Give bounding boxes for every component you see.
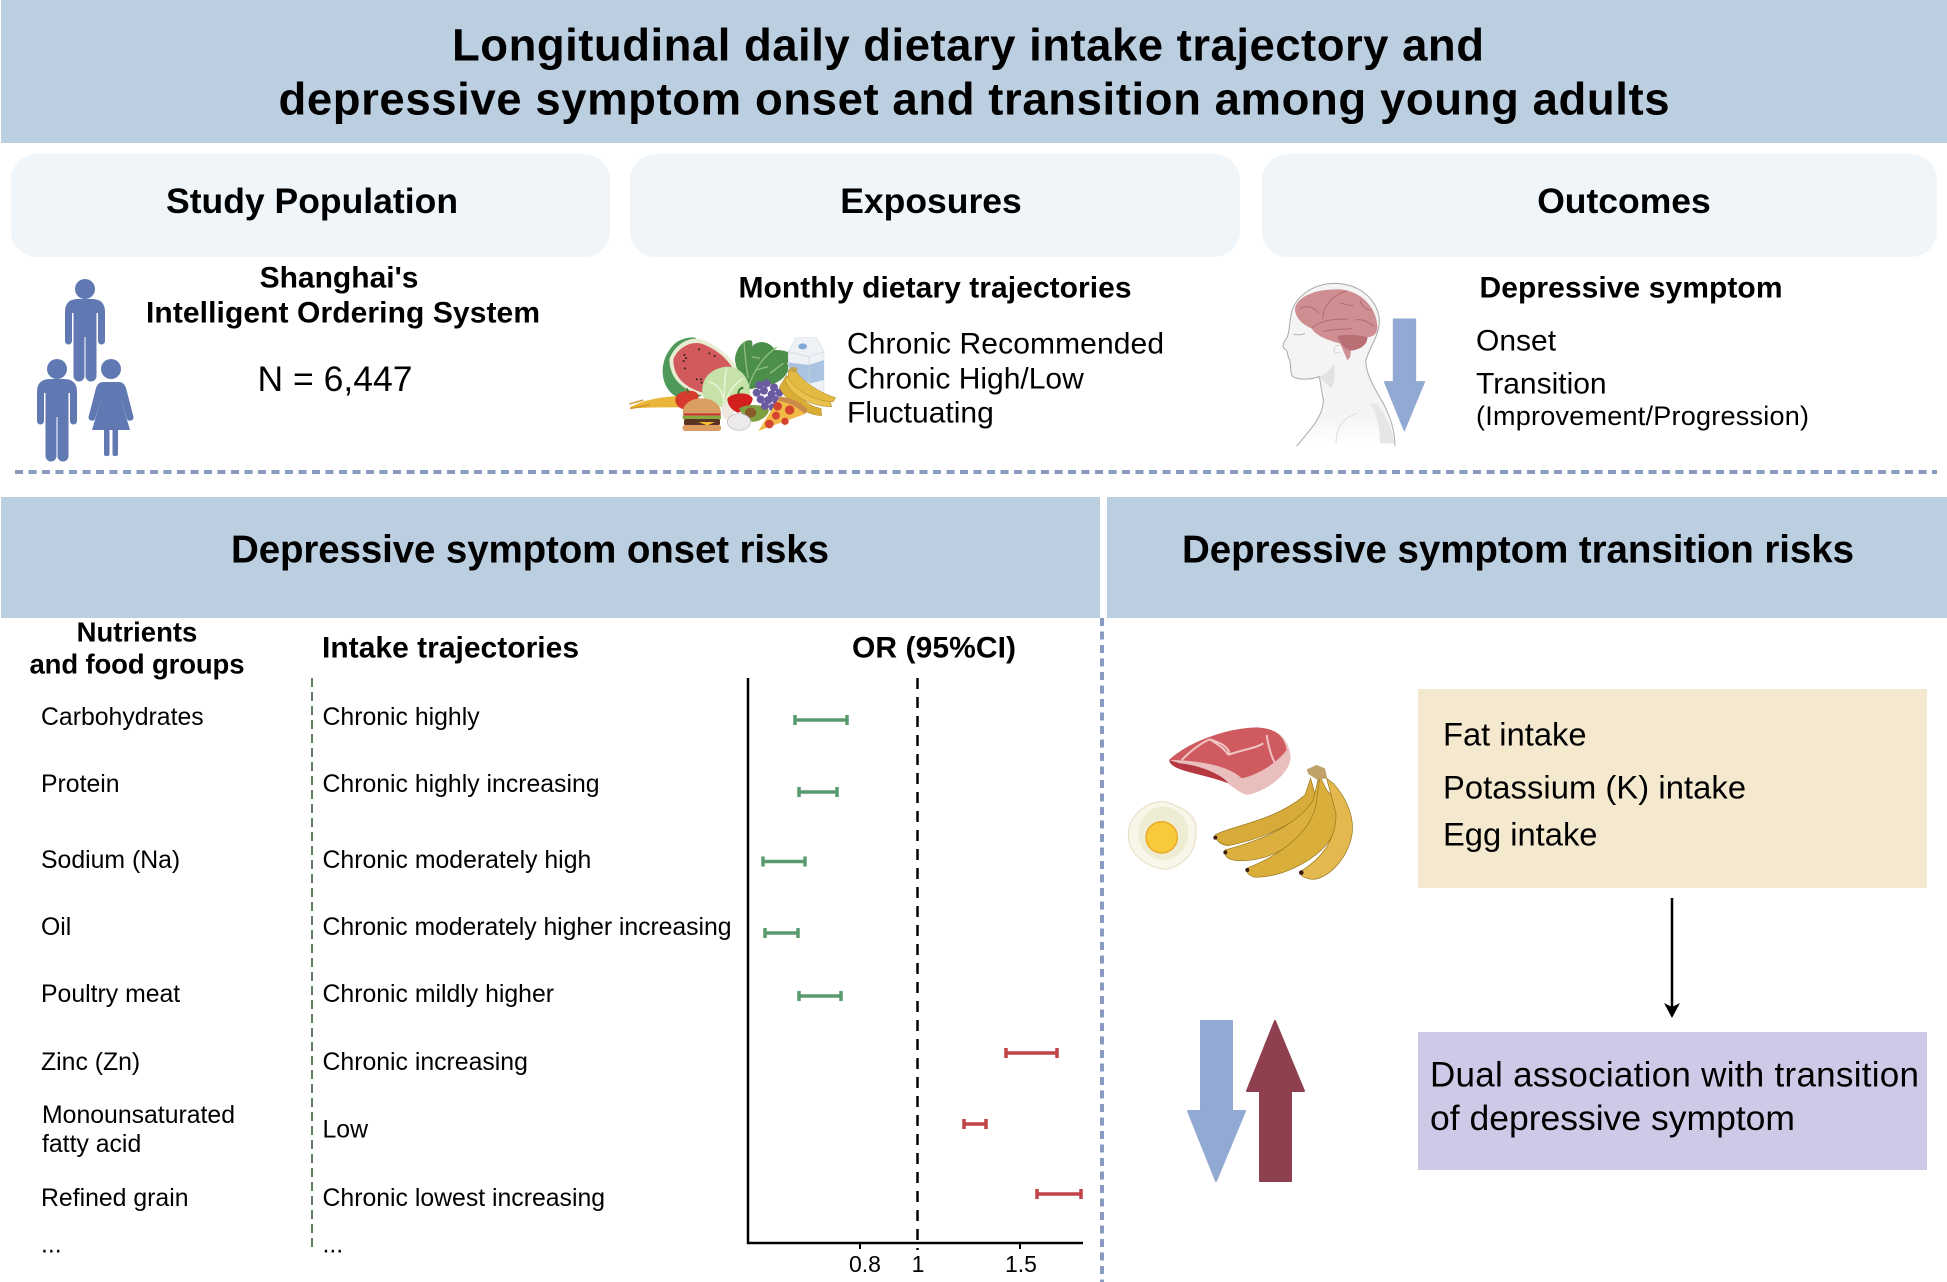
trajectory names <box>322 704 732 1258</box>
forest plot <box>747 678 1083 1277</box>
trajectory names: Chronic highly increasing <box>322 771 600 798</box>
trajectory names: Low <box>322 1116 368 1144</box>
study source: Shanghai's <box>260 262 418 294</box>
nutrient names: Monounsaturated <box>42 1102 235 1129</box>
column header: nutrients: and food groups <box>30 648 244 680</box>
exposure trajectory list: Fluctuating <box>847 396 994 430</box>
trajectory names: ... <box>322 1232 343 1258</box>
heading: exposures: Exposures <box>840 181 1022 221</box>
outcome list <box>1476 324 1809 431</box>
panel: onset risks <box>1 497 1100 1277</box>
nutrient names: Zinc (Zn) <box>41 1049 140 1076</box>
heading: outcomes: Outcomes <box>1537 181 1711 221</box>
forest plot: 1 <box>912 1251 924 1277</box>
callout: intake factors: Egg intake <box>1443 816 1597 852</box>
nutrient names: Sodium (Na) <box>41 847 180 874</box>
sample size: N = 6,447 <box>258 359 412 399</box>
panel: transition risks <box>1107 497 1947 1181</box>
panel: study population <box>11 154 610 462</box>
column header: nutrients <box>30 616 244 680</box>
callout: dual association: of depressive symptom <box>1430 1098 1795 1138</box>
nutrient names <box>41 704 235 1258</box>
exposure trajectory list: Chronic Recommended <box>847 328 1164 360</box>
trajectory names: Chronic mildly higher <box>322 981 554 1008</box>
heading: transition risks: Depressive symptom transition risks <box>1182 528 1854 572</box>
outcome list: Onset <box>1476 324 1557 358</box>
callout: intake factors: Potassium (K) intake <box>1443 768 1746 806</box>
exposure subtitle: Monthly dietary trajectories <box>738 272 1132 304</box>
outcome subtitle: Depressive symptom <box>1480 272 1782 304</box>
trajectory names: Chronic moderately higher increasing <box>322 914 732 941</box>
study source <box>146 262 540 330</box>
nutrient names: Protein <box>41 771 120 798</box>
callout: dual association: Dual association with transition <box>1430 1056 1919 1094</box>
icon: head with brain <box>1283 283 1425 446</box>
heading: study population: Study Population <box>166 181 458 221</box>
trajectory names: Chronic increasing <box>322 1049 528 1076</box>
title banner <box>1 0 1947 143</box>
nutrient names: fatty acid <box>42 1131 141 1158</box>
nutrient names: Oil <box>41 914 71 941</box>
trajectory names: Chronic lowest increasing <box>322 1185 605 1212</box>
title banner: depressive symptom onset and transition among young adults <box>278 74 1670 124</box>
forest plot: 0.8 <box>849 1251 881 1277</box>
callout: intake factors <box>1418 689 1927 888</box>
trajectory names: Chronic highly <box>322 704 480 731</box>
nutrient names: Carbohydrates <box>41 704 204 731</box>
icon: bidirectional arrows <box>1188 1021 1304 1181</box>
heading: onset risks <box>1 497 1100 618</box>
callout: dual association <box>1418 1032 1927 1170</box>
heading: outcomes <box>1262 154 1937 257</box>
outcome list: (Improvement/Progression) <box>1476 401 1809 431</box>
heading: exposures <box>630 154 1240 257</box>
outcome list: Transition <box>1476 368 1607 400</box>
exposure trajectory list <box>847 328 1164 430</box>
panel: outcomes <box>1262 154 1937 446</box>
title banner: Longitudinal daily dietary intake trajectory and <box>452 20 1484 70</box>
arrow: leads to association <box>1664 898 1680 1018</box>
heading: study population <box>11 154 610 257</box>
nutrient names: Poultry meat <box>41 981 180 1008</box>
trajectory names: Chronic moderately high <box>322 847 591 874</box>
column header: trajectories: Intake trajectories <box>322 632 579 664</box>
panel: exposures <box>629 154 1240 431</box>
nutrient names: ... <box>41 1232 62 1258</box>
exposure trajectory list: Chronic High/Low <box>847 362 1084 396</box>
nutrient names: Refined grain <box>41 1185 188 1212</box>
icon: people <box>37 279 134 462</box>
column header: nutrients: Nutrients <box>77 616 197 648</box>
icon: assorted food <box>629 337 836 431</box>
heading: transition risks <box>1107 497 1947 618</box>
callout: intake factors: Fat intake <box>1443 716 1587 752</box>
forest plot: 1.5 <box>1005 1251 1037 1277</box>
study source: Intelligent Ordering System <box>146 296 540 330</box>
heading: onset risks: Depressive symptom onset risks <box>231 528 829 572</box>
icon: meat, egg and bananas <box>1128 727 1352 879</box>
column header: odds ratio: OR (95%CI) <box>852 632 1016 664</box>
